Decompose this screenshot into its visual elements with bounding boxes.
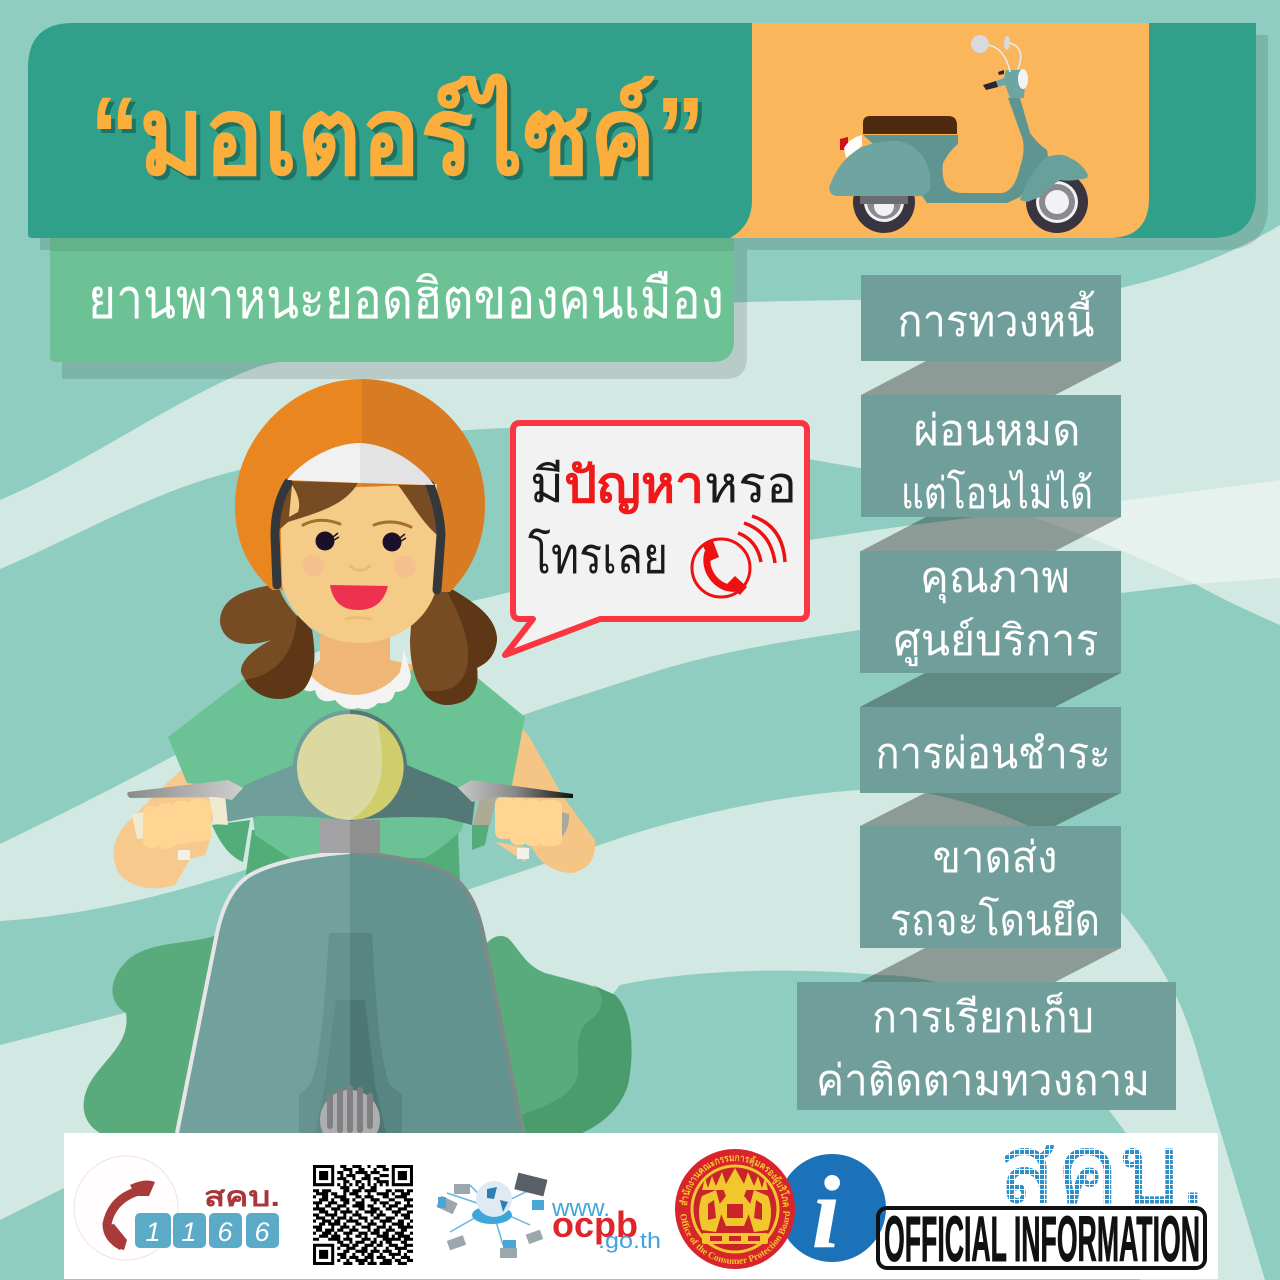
shield xyxy=(177,852,350,1133)
topic: debt collection xyxy=(861,275,1121,361)
seal emblem xyxy=(699,1168,771,1244)
eyes and brows xyxy=(303,520,411,552)
mouth xyxy=(330,585,388,610)
right hair xyxy=(410,585,497,705)
list: complaint topics xyxy=(797,275,1176,1110)
illustration: rider xyxy=(114,379,595,888)
subtitle banner xyxy=(50,238,734,362)
torso lower xyxy=(245,830,460,885)
topic: missed payment: รถจะโดนยึด xyxy=(890,896,1100,945)
header shadow xyxy=(40,35,1268,250)
nose xyxy=(350,566,370,570)
shirt xyxy=(168,665,525,858)
topic: tracking fee xyxy=(797,982,1176,1110)
face xyxy=(280,484,437,643)
logo: network globe and website: .go.th xyxy=(598,1228,661,1253)
title shadow: “มอเตอร์ไซค์” xyxy=(94,78,709,202)
cheeks xyxy=(302,555,324,577)
topic: tracking fee: การเรียกเก็บ xyxy=(872,992,1094,1042)
topic: cannot transfer: แต่โอนไม่ได้ xyxy=(901,469,1093,518)
handlebar xyxy=(225,710,350,822)
logo: hotline 1166: 6 xyxy=(217,1217,233,1247)
illustration: bushes xyxy=(84,935,632,1133)
speech bubble xyxy=(505,423,807,655)
topic: missed payment: ขาดส่ง xyxy=(932,834,1058,882)
subtitle banner shadow xyxy=(62,250,747,379)
right fist xyxy=(495,797,562,846)
grille xyxy=(320,1090,380,1133)
right arm xyxy=(500,705,595,873)
logo: network globe and website: ocpb xyxy=(552,1204,638,1245)
topic: debt collection: การทวงหนี้ xyxy=(898,290,1095,346)
list: step connectors xyxy=(860,361,1121,982)
seal: Office of the Consumer Protection Board: Office of the Consumer Protection Board xyxy=(680,1211,790,1264)
neck xyxy=(302,635,415,695)
icon: ringing phone xyxy=(692,516,785,597)
orange scooter panel xyxy=(730,23,1149,238)
left fist xyxy=(143,799,211,849)
footer strip xyxy=(64,1114,1218,1279)
headlight xyxy=(297,714,403,820)
logo: hotline 1166: 1 xyxy=(145,1217,161,1247)
left arm xyxy=(114,750,230,888)
topic: service centre quality xyxy=(860,551,1121,673)
i information icon xyxy=(778,1154,886,1270)
sleeve folds xyxy=(212,820,490,862)
topic: missed payment xyxy=(860,826,1121,948)
steering column xyxy=(320,820,350,853)
seal: Office of the Consumer Protection Board: สำนักงานคณะกรรมการคุ้มครองผู้บริโภค xyxy=(679,1155,790,1207)
helmet xyxy=(235,379,362,590)
i information icon: i xyxy=(812,1155,841,1270)
QR code xyxy=(313,1165,413,1265)
left hair xyxy=(220,585,314,697)
grips xyxy=(132,794,228,839)
logo: hotline 1166: 6 xyxy=(254,1217,270,1247)
logo: hotline 1166 xyxy=(74,1156,280,1260)
logo: network globe and website xyxy=(436,1173,661,1258)
fringe xyxy=(279,481,358,530)
thumbs xyxy=(175,840,530,862)
illustration: front of scooter xyxy=(127,710,573,1133)
topic: cannot transfer: ผ่อนหมด xyxy=(914,407,1080,455)
bubble line 2: โทรเลย xyxy=(528,528,668,584)
seal: Office of the Consumer Protection Board xyxy=(675,1149,795,1269)
topic: tracking fee: ค่าติดตามทวงถาม xyxy=(816,1057,1150,1105)
left lever xyxy=(127,780,243,800)
title: “มอเตอร์ไซค์” xyxy=(90,74,705,198)
right lever xyxy=(458,780,573,802)
helmet band xyxy=(287,443,360,483)
header banner xyxy=(28,23,1256,238)
logo: network globe and website: www. xyxy=(551,1195,610,1222)
collar xyxy=(298,650,411,709)
helmet straps xyxy=(275,483,441,590)
topic: service centre quality: คุณภาพ xyxy=(920,554,1070,604)
topic: instalments xyxy=(860,707,1121,793)
logo: สคบ. dotted heading: สคบ. xyxy=(998,1114,1206,1224)
logo: hotline 1166: 1 xyxy=(181,1217,197,1247)
icon: side-view scooter xyxy=(829,35,1088,233)
bubble line 1: มีปัญหาหรอ xyxy=(530,457,797,514)
topic: instalments: การผ่อนชำระ xyxy=(876,730,1110,778)
logo: hotline 1166: สคบ. xyxy=(204,1181,280,1212)
centre panel xyxy=(299,933,350,1133)
topic: cannot transfer xyxy=(861,395,1121,518)
topic: service centre quality: ศูนย์บริการ xyxy=(894,617,1098,667)
subtitle text: ยานพาหนะยอดฮิตของคนเมือง xyxy=(88,267,724,330)
